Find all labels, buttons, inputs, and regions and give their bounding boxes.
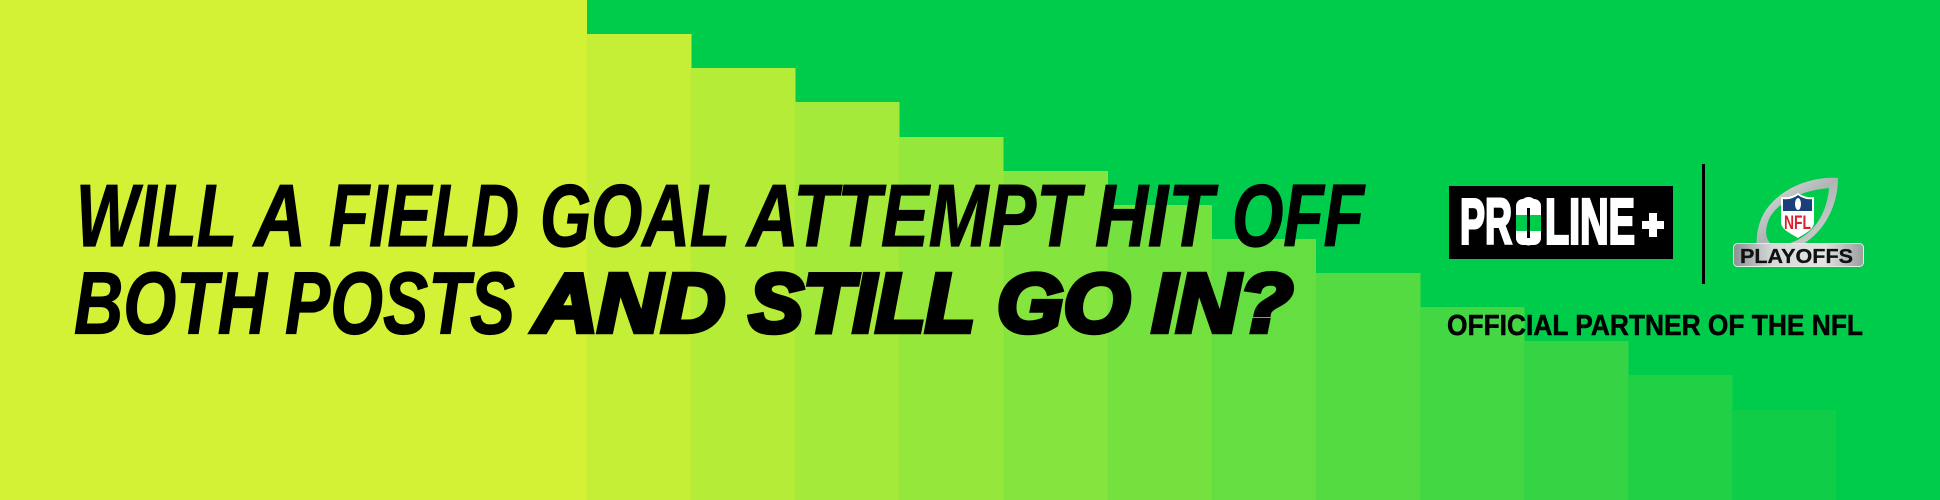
partner tagline: OFFICIAL PARTNER OF THE NFL	[1447, 310, 1863, 342]
logo: Proline+: PR	[1460, 186, 1512, 258]
logo: NFL Playoffs	[1734, 178, 1864, 268]
headline line 2: GO	[997, 256, 1130, 350]
headline line 2: STILL	[749, 256, 975, 350]
headline line 1: WILL	[76, 166, 237, 265]
logo: Proline+	[1449, 186, 1673, 259]
logo plus sign	[1642, 213, 1664, 237]
headline line 1: A	[252, 166, 306, 265]
headline line 1	[76, 166, 1366, 265]
headline line 2: BOTH	[74, 254, 269, 352]
NFL shield: NFL	[1784, 213, 1811, 234]
headline line 1: HIT	[1095, 166, 1218, 265]
headline line 2: IN?	[1152, 256, 1293, 350]
logo letter O with green centre	[1516, 186, 1541, 258]
logo letter O with green centre: O	[1516, 186, 1541, 258]
headline line 1: ATTEMPT	[745, 166, 1085, 265]
Playoffs plaque: PLAYOFFS	[1740, 245, 1853, 268]
headline line 2: AND	[532, 256, 725, 350]
headline line 2	[74, 254, 1293, 352]
headline line 2: POSTS	[285, 254, 515, 352]
divider	[1702, 164, 1705, 284]
headline line 1: FIELD	[329, 166, 519, 265]
headline line 1: GOAL	[540, 166, 730, 265]
logo: Proline+: LINE	[1545, 186, 1635, 258]
headline line 1: OFF	[1232, 166, 1366, 265]
headline	[74, 166, 1366, 352]
football ring	[1757, 178, 1838, 246]
